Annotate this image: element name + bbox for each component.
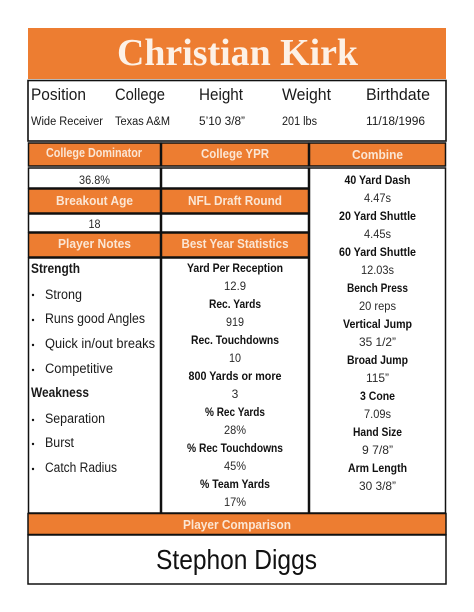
panel: player notes: Competitive — [45, 361, 113, 376]
panel: combine: 4.47s — [364, 191, 391, 205]
panel: player comparison: Player Comparison — [183, 517, 291, 532]
panel: best year statistics: Rec. Touchdowns — [191, 333, 279, 347]
panel: best year statistics: % Rec Touchdowns — [187, 441, 283, 455]
panel: college dominator: 36.8% — [79, 173, 110, 187]
panel: player bio: 5’10 3/8” — [199, 116, 245, 128]
panel: best year statistics: 3 — [232, 387, 239, 401]
panel: breakout age — [28, 189, 160, 232]
panel: combine: Vertical Jump — [343, 317, 412, 331]
panel: college YPR: College YPR — [201, 146, 270, 161]
panel: player notes: Burst — [45, 435, 74, 450]
panel: best year statistics: 28% — [224, 423, 246, 437]
panel: combine — [310, 143, 446, 513]
panel: player notes: Catch Radius — [45, 460, 117, 475]
panel: combine: 9 7/8” — [362, 443, 393, 457]
panel: player bio: Texas A&M — [115, 116, 170, 128]
panel: best year statistics: Rec. Yards — [209, 297, 261, 311]
panel: player notes: Player Notes — [58, 236, 131, 251]
panel: player bio: Wide Receiver — [31, 116, 103, 128]
panel: breakout age: 18 — [88, 217, 101, 231]
panel: player notes — [28, 233, 160, 513]
panel: combine: Bench Press — [347, 281, 408, 295]
panel: combine: 40 Yard Dash — [344, 173, 410, 187]
panel: best year statistics: 17% — [224, 495, 246, 509]
panel: combine: Arm Length — [348, 461, 407, 475]
panel: best year statistics: 800 Yards or more — [188, 369, 282, 383]
panel: player notes: Quick in/out breaks — [45, 336, 155, 351]
panel: player bio: Weight — [282, 85, 331, 104]
panel: college YPR — [162, 143, 308, 188]
panel: player notes: Strong — [45, 287, 82, 302]
panel: player bio: Position — [31, 85, 86, 104]
title banner — [28, 28, 446, 79]
panel: best year statistics: 45% — [224, 459, 246, 473]
panel: combine: 115” — [366, 371, 389, 385]
panel: breakout age: Breakout Age — [56, 193, 133, 208]
panel: combine: 12.03s — [361, 263, 394, 277]
panel: best year statistics: Yard Per Reception — [187, 261, 283, 275]
panel: combine: 4.45s — [364, 227, 391, 241]
panel: player bio: 201 lbs — [282, 116, 317, 128]
panel: NFL draft round: NFL Draft Round — [188, 193, 282, 208]
title banner: Christian Kirk — [117, 32, 359, 74]
panel: combine: 30 3/8” — [359, 479, 396, 493]
panel: NFL draft round — [162, 189, 308, 232]
panel: best year statistics: 12.9 — [224, 279, 246, 293]
panel: player notes: Separation — [45, 411, 105, 426]
panel: combine: Combine — [352, 147, 403, 162]
panel: combine: 20 reps — [359, 299, 396, 313]
panel: best year statistics: 10 — [229, 351, 241, 365]
panel: player bio: Height — [199, 85, 243, 104]
panel: player bio: College — [115, 85, 165, 104]
panel: best year statistics: % Rec Yards — [205, 405, 265, 419]
panel: player comparison — [28, 514, 446, 584]
panel: combine: Broad Jump — [347, 353, 408, 367]
panel: player comparison: Stephon Diggs — [156, 544, 317, 575]
panel: player bio: 11/18/1996 — [366, 116, 425, 128]
panel: college dominator — [28, 143, 160, 188]
panel: combine: 60 Yard Shuttle — [339, 245, 416, 259]
panel: combine: 7.09s — [364, 407, 391, 421]
panel: combine: 3 Cone — [360, 389, 395, 403]
panel: best year statistics — [162, 233, 308, 513]
panel: player bio: Birthdate — [366, 85, 430, 104]
panel: best year statistics: % Team Yards — [200, 477, 270, 491]
panel: player notes: Strength — [31, 261, 80, 276]
panel: combine: Hand Size — [353, 425, 402, 439]
panel: best year statistics: 919 — [226, 315, 244, 329]
panel: combine: 20 Yard Shuttle — [339, 209, 416, 223]
panel: college dominator: College Dominator — [46, 145, 142, 160]
panel: player bio — [28, 80, 446, 141]
panel: player notes: Weakness — [31, 385, 89, 400]
panel: player notes: Runs good Angles — [45, 311, 145, 326]
panel: combine: 35 1/2” — [359, 335, 396, 349]
panel: best year statistics: Best Year Statistics — [182, 236, 288, 251]
